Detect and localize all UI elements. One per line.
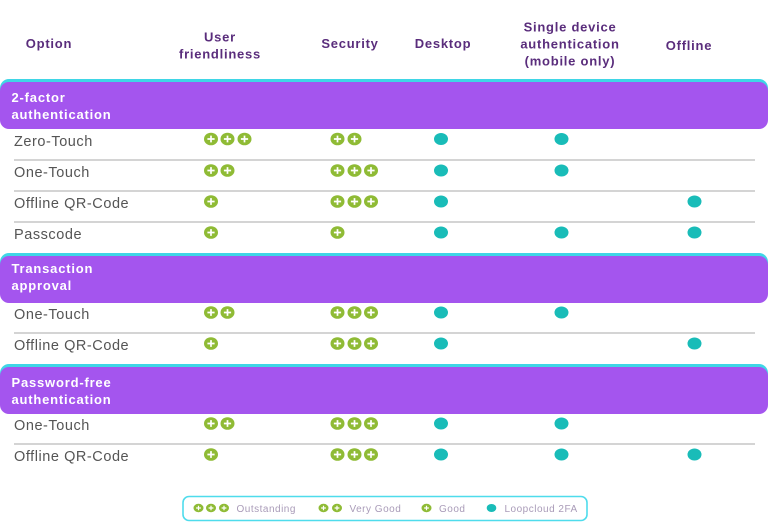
section bar [0, 79, 768, 129]
section bar: Password-free [12, 375, 112, 390]
row: Offline QR-Code [14, 195, 755, 222]
row: Offline QR-Code: Offline QR-Code [14, 449, 129, 465]
section bar [0, 253, 768, 303]
heading: User friendliness: User [204, 30, 236, 44]
row: Offline QR-Code [14, 337, 702, 354]
row: One-Touch: One-Touch [14, 165, 90, 181]
legend: Good [422, 504, 465, 515]
section bar: authentication [12, 392, 112, 407]
legend: Outstanding [194, 504, 296, 515]
heading: User friendliness: friendliness [179, 46, 261, 62]
row: Zero-Touch: Zero-Touch [14, 134, 93, 150]
row: One-Touch: One-Touch [14, 418, 90, 434]
section bar: approval [12, 278, 72, 293]
section bar: 2-factor [12, 90, 66, 105]
legend: Very Good: Very Good [350, 504, 401, 515]
section bar: Transaction [12, 261, 93, 276]
row: Passcode: Passcode [14, 227, 82, 243]
column headers [26, 20, 712, 68]
heading: Single device authentication (mobile only): Single device [524, 20, 616, 34]
heading: Offline: Offline [666, 38, 712, 53]
row: One-Touch [14, 417, 755, 444]
legend: Loopcloud 2FA: Loopcloud 2FA [504, 504, 578, 515]
legend: Good: Good [439, 504, 465, 515]
section: 2-factor authentication [0, 79, 768, 243]
heading: Single device authentication (mobile only): authentication [520, 36, 620, 52]
section: Transaction approval [0, 253, 768, 354]
row: One-Touch [14, 306, 755, 333]
section bar [0, 364, 768, 414]
legend: Outstanding: Outstanding [236, 504, 296, 515]
legend frame [183, 496, 587, 520]
row: Offline QR-Code [14, 448, 702, 465]
row: Passcode [14, 226, 702, 243]
heading: Single device authentication (mobile only): (mobile only) [525, 54, 615, 68]
legend: Very Good [318, 504, 401, 515]
section: Password-free authentication [0, 364, 768, 465]
legend [183, 496, 587, 520]
row: Offline QR-Code: Offline QR-Code [14, 338, 129, 354]
row: Zero-Touch [14, 133, 755, 160]
section bar: authentication [12, 107, 112, 122]
row: One-Touch [14, 164, 755, 191]
row: One-Touch: One-Touch [14, 307, 90, 323]
row: Offline QR-Code: Offline QR-Code [14, 196, 129, 212]
heading: Security: Security [321, 36, 379, 51]
heading: Desktop: Desktop [415, 36, 471, 51]
heading: Option: Option [26, 36, 72, 51]
